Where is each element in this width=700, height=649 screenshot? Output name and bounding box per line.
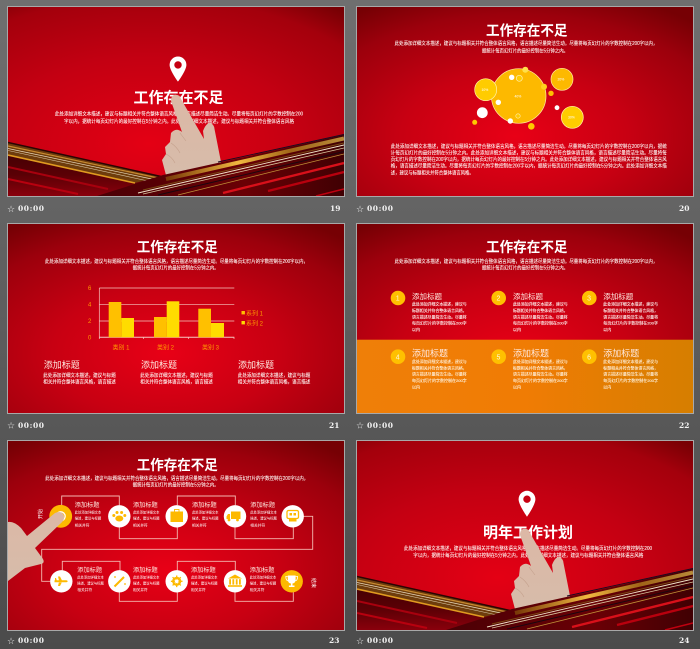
step text 3: 描述，建议与标题 <box>192 516 219 520</box>
step text 8: 相关并符 <box>250 587 265 592</box>
footer: time <box>356 204 393 215</box>
text column 1: 相关并符合整体语言风格，语言描述 <box>43 378 116 386</box>
pointing hand <box>8 512 64 581</box>
chart legend <box>242 310 264 328</box>
step text 8: 此处添加详细文本 <box>250 574 276 579</box>
item 4: 4 <box>396 354 400 361</box>
step text 4: 此处添加详细文本 <box>250 510 277 514</box>
bar chart: 类别 3 <box>202 344 220 352</box>
description text <box>394 258 658 271</box>
step text 6: 添加标题 <box>133 566 158 574</box>
item 5: 添加标题 <box>513 348 549 359</box>
step text 8 <box>250 566 276 592</box>
description text: 据统计每页幻灯片的最好控制在5分钟之内。 <box>133 482 219 489</box>
item 4: 以内 <box>412 383 420 389</box>
item 2: 添加标题 <box>513 291 543 301</box>
text column 3: 此处添加详细文本描述，建议与标题 <box>238 372 310 379</box>
panel: slide 19 <box>7 6 344 215</box>
item 6: 添加标题 <box>603 348 639 359</box>
icon: magic wand <box>108 570 130 592</box>
footer: time: 00:00 <box>367 421 393 430</box>
title: 工作存在不足 <box>486 22 568 38</box>
text column 2: 此处添加详细文本描述，建议与标题 <box>140 372 213 379</box>
text column 2: 相关并符合整体语言风格，语言描述 <box>140 378 213 386</box>
step text 7: 相关并符 <box>191 587 206 592</box>
item 6: 6 <box>587 354 591 361</box>
description text: 此处添加详细文本描述，建议与标题相关并符合整体语言风格，语言描述尽量简洁生动。尽量将每页幻灯片的字数控制在200字以内， <box>45 475 308 482</box>
item 4: 每页幻灯片的字数控制在200字 <box>412 377 467 383</box>
item 3: 此处添加详细文本描述，建议与 <box>603 300 658 306</box>
title: 工作存在不足 <box>137 239 218 255</box>
item 5: 标题相关并符合整体语言风格， <box>513 364 568 370</box>
item 3: 以内 <box>603 326 611 332</box>
footer: time: ☆ <box>356 205 364 215</box>
step text 3: 添加标题 <box>192 501 217 509</box>
title: 明年工作计划 <box>483 524 573 542</box>
step text 4: 添加标题 <box>250 501 275 509</box>
item 5: 以内 <box>513 383 521 389</box>
step text 6: 此处添加详细文本 <box>133 574 160 579</box>
description text <box>45 475 308 489</box>
step text 2: 相关并符 <box>133 522 148 527</box>
icon: gear <box>166 570 188 592</box>
ribbons and pointing hand <box>357 529 693 630</box>
icon: briefcase <box>166 505 188 528</box>
step text 2: 此处添加详细文本 <box>133 510 160 514</box>
item 2: 标题相关并符合整体语言风格， <box>513 307 568 313</box>
footer: time: ☆ <box>356 422 364 432</box>
step text 7: 描述，建议与标题 <box>191 580 218 585</box>
step text 6: 描述，建议与标题 <box>133 580 160 585</box>
body paragraph <box>391 143 667 177</box>
description text: 据统计每页幻灯片的最好控制在5分钟之内。 <box>133 264 219 271</box>
text column 1 <box>43 359 116 386</box>
item 6: 此处添加详细文本描述，建议与 <box>603 358 658 364</box>
step text 1: 相关并符 <box>75 522 90 527</box>
title: 工作存在不足 <box>137 457 218 473</box>
process flow connector <box>42 496 313 601</box>
item 1: 标题相关并符合整体语言风格， <box>412 307 467 313</box>
step text 3: 此处添加详细文本 <box>192 510 219 514</box>
footer: time <box>356 636 393 647</box>
bar chart: 2 <box>88 319 92 325</box>
bar chart: 6 <box>88 286 92 292</box>
step text 5: 此处添加详细文本 <box>77 574 104 579</box>
page number: 22 <box>679 421 689 430</box>
bar chart: 类别 2 <box>157 344 175 352</box>
bubble chart: 10% <box>482 88 488 92</box>
footer: time <box>7 636 44 647</box>
page number: 23 <box>329 636 339 645</box>
description text <box>55 110 303 125</box>
body paragraph: 此处添加详细文本描述，建议与标题相关并符合整体语言风格，语言描述尽量简洁生动。尽量将每页幻灯片的字数控制在200字以内，据统 <box>391 143 667 150</box>
item 4: 添加标题 <box>412 348 448 359</box>
item 1: 1 <box>396 296 400 303</box>
item 1: 每页幻灯片的字数控制在200字 <box>412 320 467 326</box>
bar chart: 类别 1 <box>112 344 130 352</box>
description text: 此处添加详细文本描述，建议与标题相关并符合整体语言风格，语言描述尽量简洁生动。尽量将每页幻灯片的字数控制在200 <box>55 110 303 118</box>
page number: 19 <box>330 204 340 213</box>
footer: time: 00:00 <box>18 636 44 645</box>
description text: 据统计每页幻灯片的最好控制在5分钟之内。 <box>482 264 568 271</box>
bubble chart <box>472 67 583 130</box>
description text: 此处添加详细文本描述，建议与标题相关并符合整体语言风格，语言描述尽量简洁生动。尽量将每页幻灯片的字数控制在200字以内， <box>45 258 308 265</box>
icon: bank <box>224 570 246 592</box>
item 2: 语言描述尽量简洁生动。尽量将 <box>513 313 568 319</box>
end label: 结束 <box>310 578 317 588</box>
item 2: 此处添加详细文本描述，建议与 <box>513 300 568 306</box>
step text 1 <box>75 501 101 527</box>
step text 3 <box>192 501 219 527</box>
item 3: 3 <box>587 296 591 303</box>
step text 5: 描述，建议与标题 <box>77 580 104 585</box>
panel: slide 23 <box>7 440 344 647</box>
step text 1: 添加标题 <box>75 501 99 509</box>
body paragraph: 述，建议与标题相关并符合整体语言风格。 <box>391 170 474 177</box>
item 5 <box>491 348 568 389</box>
description text <box>404 545 652 559</box>
description text: 字以内，据统计每页幻灯片的最好控制在5分钟之内。此处添加详细文本描述，建议与标题相关并符合整体语言风格 <box>64 118 294 125</box>
footer: time <box>356 421 393 432</box>
item 4 <box>391 348 467 389</box>
icon: map pin <box>170 56 186 82</box>
text column 3: 添加标题 <box>238 359 274 370</box>
item 6 <box>582 348 658 389</box>
body paragraph: 格，语言描述尽量简洁生动。尽量将每页幻灯片的字数控制在200字以内，据统计每页幻灯片的最好控制在5分钟之内。此处添加详细文本描 <box>391 162 667 169</box>
panel: slide 22 <box>356 224 694 432</box>
description text: 字以内，据统计每页幻灯片的最好控制在5分钟之内。此处添加详细文本描述，建议与标题相关并符合整体语言风格 <box>413 552 643 559</box>
step text 4: 描述，建议与标题 <box>250 516 277 520</box>
item 1 <box>391 291 467 332</box>
text column 3: 相关并符合整体语言风格，语言描述 <box>238 378 310 386</box>
step text 8: 描述，建议与标题 <box>250 580 276 585</box>
item 3: 标题相关并符合整体语言风格， <box>603 307 658 313</box>
item 4: 此处添加详细文本描述，建议与 <box>412 358 467 364</box>
icon: truck <box>224 505 246 528</box>
item 2: 每页幻灯片的字数控制在200字 <box>513 320 568 326</box>
footer: time: ☆ <box>7 637 15 647</box>
item 2: 以内 <box>513 326 521 332</box>
text column 2 <box>140 359 213 386</box>
orange band <box>357 340 693 413</box>
item 6: 以内 <box>603 383 611 389</box>
start label: 开始 <box>37 509 44 519</box>
bar chart: 4 <box>88 302 92 308</box>
title: 工作存在不足 <box>134 88 224 106</box>
text column 3 <box>238 359 310 386</box>
icon: start <box>49 505 72 528</box>
item 1: 以内 <box>412 326 420 332</box>
body paragraph: 计每页幻灯片的最好控制在5分钟之内。此处添加详细文本描述，建议与标题相关并符合整体语言风格，语言描述尽量简洁生动。尽量将每 <box>391 149 667 156</box>
item 1: 添加标题 <box>412 291 442 301</box>
description text: 此处添加详细文本描述，建议与标题相关并符合整体语言风格，语言描述尽量简洁生动。尽量将每页幻灯片的字数控制在200字以内， <box>394 258 658 265</box>
page number: 21 <box>329 421 339 430</box>
step text 7: 添加标题 <box>191 566 216 574</box>
description text: 据统计每页幻灯片的最好控制在5分钟之内。 <box>482 47 568 54</box>
panel: slide 20 <box>356 6 694 215</box>
step text 1: 此处添加详细文本 <box>75 510 101 514</box>
step text 4 <box>250 501 277 527</box>
item 3: 语言描述尽量简洁生动。尽量将 <box>603 313 658 319</box>
item 2: 2 <box>496 296 500 303</box>
step text 7: 此处添加详细文本 <box>191 574 218 579</box>
icon: plane <box>50 570 72 592</box>
step text 7 <box>191 566 218 592</box>
footer: time: ☆ <box>7 422 15 432</box>
footer: time: 00:00 <box>367 204 393 213</box>
icon: paw <box>108 505 130 528</box>
footer: time <box>7 204 44 215</box>
footer: time: ☆ <box>7 205 15 215</box>
item 5: 语言描述尽量简洁生动。尽量将 <box>513 371 568 377</box>
step text 5 <box>77 566 104 592</box>
step text 5: 添加标题 <box>77 566 102 574</box>
step circles and icons <box>49 505 304 592</box>
step text 8: 添加标题 <box>250 566 274 574</box>
bar chart <box>88 286 264 352</box>
ribbons and pointing hand <box>8 95 344 196</box>
item 6: 每页幻灯片的字数控制在200字 <box>603 377 658 383</box>
item 5: 5 <box>496 354 500 361</box>
page number: 24 <box>679 636 689 645</box>
text column 1: 添加标题 <box>44 359 80 370</box>
step text 1: 描述，建议与标题 <box>75 516 101 520</box>
item 6: 标题相关并符合整体语言风格， <box>603 364 658 370</box>
item 3: 添加标题 <box>603 291 634 301</box>
item 4: 语言描述尽量简洁生动。尽量将 <box>412 371 467 377</box>
text column 1: 此处添加详细文本描述，建议与标题 <box>43 372 116 379</box>
step text 3: 相关并符 <box>192 522 207 527</box>
item 3: 每页幻灯片的字数控制在200字 <box>603 320 658 326</box>
footer: time <box>7 421 44 432</box>
bubble chart: 40% <box>514 94 521 98</box>
step text 6 <box>133 566 160 592</box>
item 1: 语言描述尽量简洁生动。尽量将 <box>412 313 467 319</box>
step text 5: 相关并符 <box>77 587 92 592</box>
footer: time: 00:00 <box>18 204 44 213</box>
footer: time: 00:00 <box>18 421 44 430</box>
bubble chart: 20% <box>558 78 564 82</box>
icon: robot <box>282 505 304 528</box>
panel: slide 24 <box>356 440 694 647</box>
step text 6: 相关并符 <box>133 587 148 592</box>
description text <box>394 40 658 54</box>
description text: 此处添加详细文本描述，建议与标题相关并符合整体语言风格，语言描述尽量简洁生动。尽量将每页幻灯片的字数控制在200 <box>404 545 652 552</box>
item 6: 语言描述尽量简洁生动。尽量将 <box>603 371 658 377</box>
footer: time: 00:00 <box>367 636 393 645</box>
item 1: 此处添加详细文本描述，建议与 <box>412 300 467 306</box>
description text: 此处添加详细文本描述，建议与标题相关并符合整体语言风格，语言描述尽量简洁生动。尽量将每页幻灯片的字数控制在200字以内， <box>394 40 658 47</box>
page number: 20 <box>679 204 689 213</box>
item 5: 此处添加详细文本描述，建议与 <box>513 358 568 364</box>
text column 2: 添加标题 <box>141 359 177 370</box>
chart legend: 系列 2 <box>246 320 264 328</box>
icon: trophy <box>280 570 303 592</box>
footer: time: ☆ <box>356 637 364 647</box>
body paragraph: 页幻灯片的字数控制在200字以内，据统计每页幻灯片的最好控制在5分钟之内。此处添加详细文本描述，建议与标题相关并符合整体语言风 <box>391 156 667 163</box>
step text 2: 描述，建议与标题 <box>133 516 160 520</box>
bubble chart: 30% <box>568 116 575 120</box>
panel: slide 21 <box>7 224 344 432</box>
step text 4: 相关并符 <box>250 522 265 527</box>
step text 2 <box>133 501 160 527</box>
description text <box>45 258 308 271</box>
chart legend: 系列 1 <box>246 310 264 318</box>
item 2 <box>491 291 568 332</box>
title: 工作存在不足 <box>486 239 568 255</box>
item 4: 标题相关并符合整体语言风格， <box>412 364 467 370</box>
icon: map pin <box>519 491 535 517</box>
item 5: 每页幻灯片的字数控制在200字 <box>513 377 568 383</box>
step text 2: 添加标题 <box>133 501 158 509</box>
bar chart: 0 <box>88 336 92 342</box>
item 3 <box>582 291 658 332</box>
